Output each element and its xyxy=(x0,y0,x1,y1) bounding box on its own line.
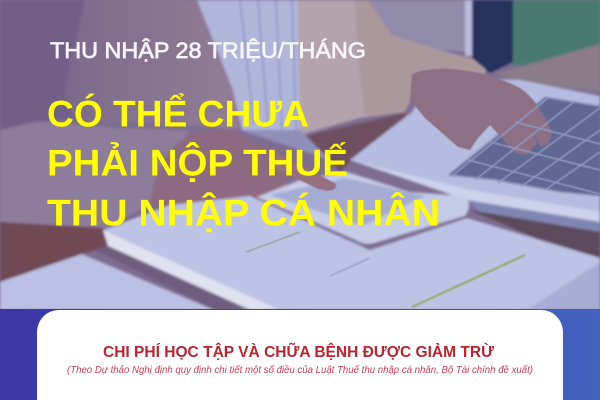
wall xyxy=(368,0,465,52)
main headline xyxy=(47,92,440,234)
background photo: hands on laptop and calculator xyxy=(0,0,600,310)
desk middle xyxy=(300,113,412,172)
eyebrow heading: THU NHẬP 28 TRIỆU/THÁNG xyxy=(50,38,366,63)
laptop xyxy=(350,78,600,222)
left sleeve xyxy=(0,0,90,130)
desk right xyxy=(495,44,600,92)
bottom blue band xyxy=(0,309,600,400)
card source note: (Theo Dự thảo Nghị định quy định chi tiết một số điều của Luật Thuế thu nhập cá nhân, Bộ Tài chính đề xuất) xyxy=(67,365,533,376)
calculator xyxy=(257,172,469,244)
main papers xyxy=(103,196,600,310)
striped shirt xyxy=(197,0,300,135)
hand on calculator xyxy=(150,129,335,207)
main headline: THU NHẬP CÁ NHÂN xyxy=(47,192,440,234)
blazer xyxy=(298,0,485,135)
right desk lower xyxy=(470,210,600,262)
green highlighter lines xyxy=(412,255,525,307)
laptop keyboard xyxy=(448,97,600,196)
white card xyxy=(37,310,563,400)
lower forearm xyxy=(0,122,190,228)
card title: CHI PHÍ HỌC TẬP VÀ CHỮA BỆNH ĐƯỢC GIẢM TRỪ xyxy=(103,343,494,361)
main headline: CÓ THỂ CHƯA xyxy=(47,92,309,134)
table left lower xyxy=(0,222,110,282)
hand on keyboard xyxy=(410,69,552,155)
clip on the right xyxy=(520,262,600,310)
keyboard rows xyxy=(452,98,600,194)
paper lower-left xyxy=(0,254,214,310)
upper forearm xyxy=(64,0,240,130)
green outside xyxy=(513,0,600,65)
main headline: PHẢI NỘP THUẾ xyxy=(47,142,348,184)
laptop edge xyxy=(350,160,600,222)
window frame xyxy=(472,0,513,73)
finger tip over calculator xyxy=(270,150,336,191)
